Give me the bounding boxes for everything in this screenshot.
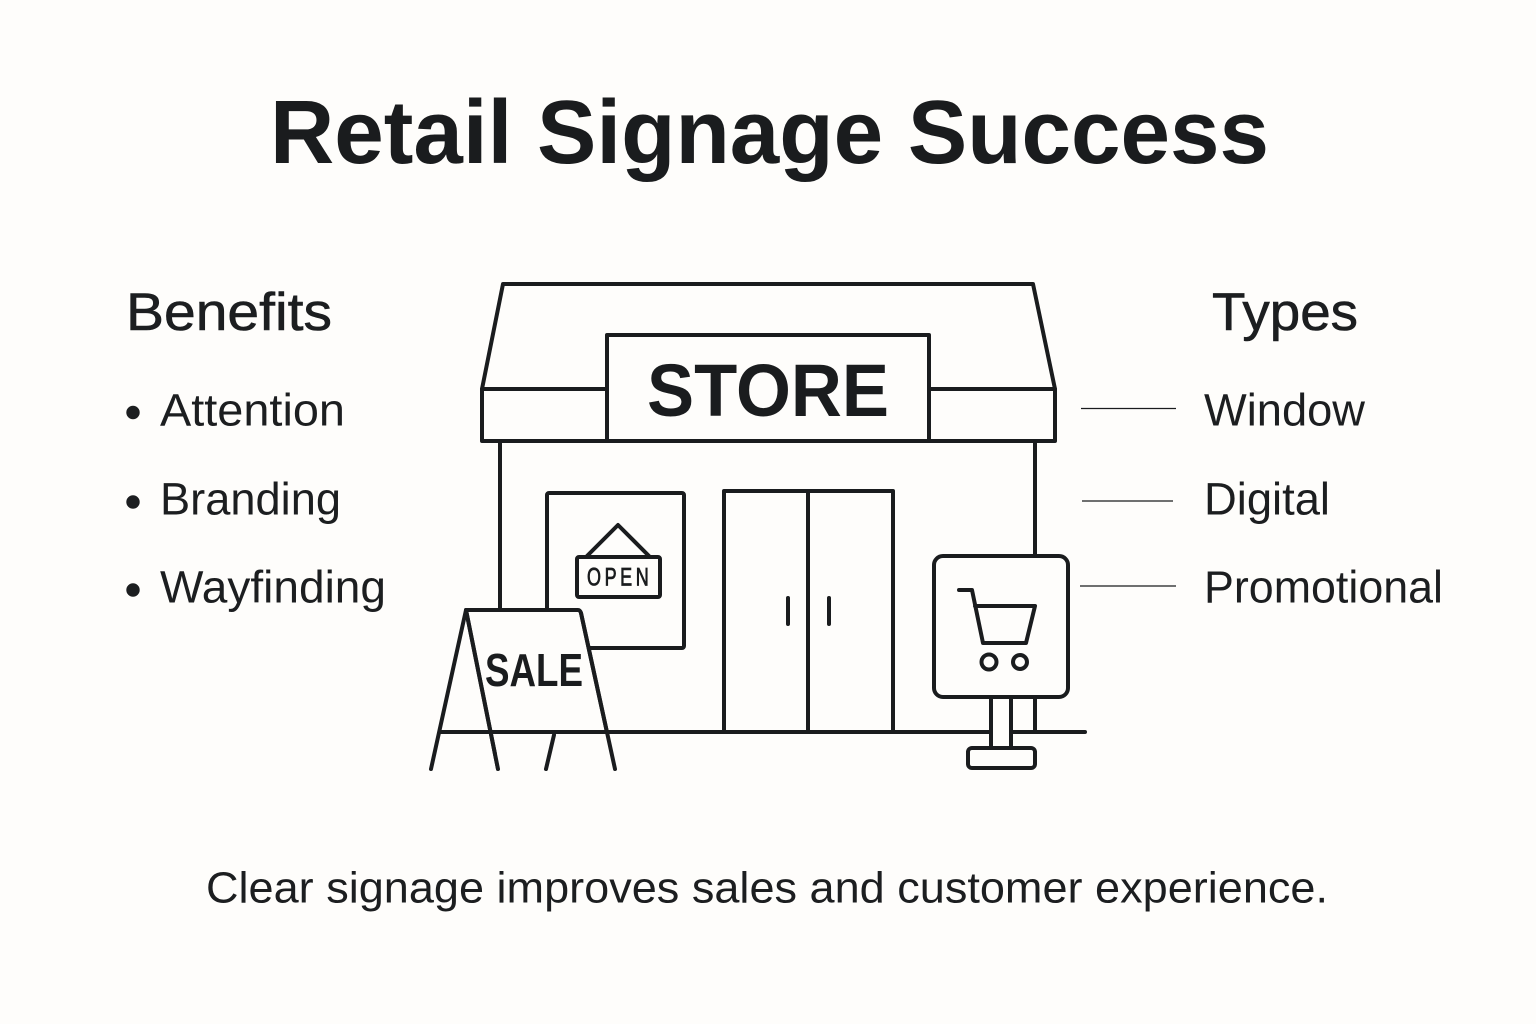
kiosk post xyxy=(991,697,1011,751)
open hanging sign: OPEN xyxy=(587,563,652,591)
panel: benefits xyxy=(126,283,386,612)
sale a-frame sign xyxy=(431,610,617,772)
list item: branding: Branding xyxy=(160,474,341,524)
building walls xyxy=(500,441,1035,732)
store sign: STORE xyxy=(647,349,889,432)
list item: attention: Attention xyxy=(160,384,345,436)
heading: benefits: Benefits xyxy=(126,283,332,342)
heading: types: Types xyxy=(1212,283,1358,342)
open hanging sign xyxy=(577,525,660,597)
awning band line xyxy=(482,387,1055,391)
kiosk base xyxy=(968,748,1035,768)
footer caption: Clear signage improves sales and customer experience. xyxy=(206,864,1328,912)
cart kiosk sign xyxy=(934,556,1068,768)
icon: shopping cart xyxy=(959,590,1035,670)
window xyxy=(547,493,684,648)
list item: wayfinding: Wayfinding xyxy=(160,562,386,612)
panel: types xyxy=(1080,283,1443,612)
connector: digital xyxy=(1082,500,1173,502)
illustration: storefront xyxy=(431,284,1085,772)
kiosk panel xyxy=(934,556,1068,697)
roof awning xyxy=(482,284,1055,441)
label: window: Window xyxy=(1204,384,1365,436)
ground line xyxy=(441,730,1085,734)
connector: promotional xyxy=(1080,585,1176,587)
store sign xyxy=(607,335,929,441)
double door xyxy=(724,491,893,732)
connector: window xyxy=(1081,408,1176,410)
sale a-frame sign: SALE xyxy=(485,644,583,696)
label: digital: Digital xyxy=(1204,474,1330,524)
title: Retail Signage Success xyxy=(270,83,1269,183)
label: promotional: Promotional xyxy=(1204,562,1443,612)
